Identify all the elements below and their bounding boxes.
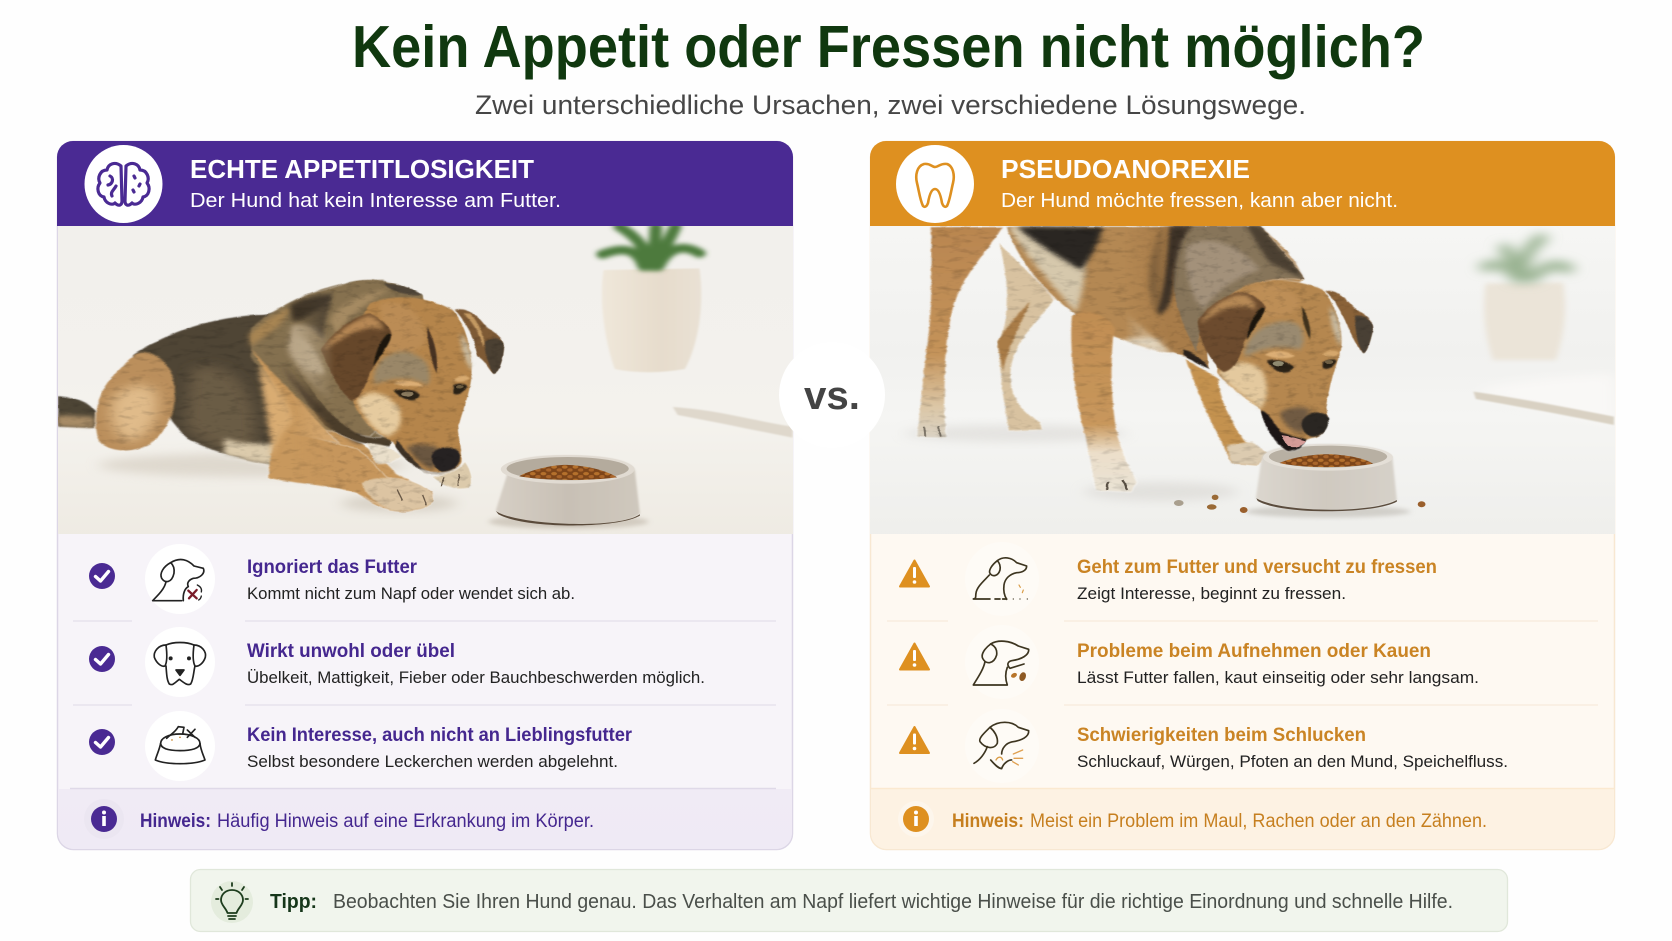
tip text: Tipp: — [270, 891, 317, 913]
icon: dog turning away — [145, 544, 215, 614]
row: Geht zum Futter — [900, 542, 1437, 616]
heading: Schwierigkeiten beim Schlucken — [1077, 724, 1366, 746]
header — [870, 141, 1615, 226]
row: Schwierigkeiten beim Schlucken — [900, 709, 1508, 783]
hint bar — [871, 788, 1614, 849]
subheading: Der Hund hat kein Interesse am Futter. — [190, 190, 561, 212]
row: Ignoriert das Futter — [89, 544, 575, 614]
photo: dog trying to eat — [870, 225, 1630, 545]
heading: Ignoriert das Futter — [247, 556, 417, 578]
vs badge: vs. — [804, 374, 860, 418]
icon: brain — [84, 145, 162, 223]
icon: check badge — [89, 563, 115, 589]
photo: dog lying in front of bowl — [50, 225, 810, 545]
heading: Geht zum Futter und versucht zu fressen — [1077, 556, 1437, 578]
icon: warning — [900, 727, 929, 753]
icon: check badge — [89, 729, 115, 755]
row: Probleme beim Aufnehmen — [900, 625, 1479, 699]
header — [57, 141, 793, 226]
hint text: Häufig Hinweis auf eine Erkrankung im Körper. — [217, 811, 594, 832]
description: Übelkeit, Mattigkeit, Fieber oder Bauchbeschwerden möglich. — [247, 669, 705, 687]
icon: dog swallowing — [965, 709, 1039, 783]
bowl — [1256, 444, 1397, 511]
subheading: Der Hund möchte fressen, kann aber nicht. — [1001, 190, 1398, 212]
icon: warning — [900, 644, 929, 670]
hint text: Hinweis: — [140, 811, 211, 832]
icon: warning — [900, 560, 929, 586]
icon: food bowl with cross — [145, 711, 215, 781]
panel: Pseudoanorexie — [870, 141, 1630, 850]
description: Kommt nicht zum Napf oder wendet sich ab. — [247, 585, 575, 603]
icon: info — [898, 801, 934, 837]
heading: Probleme beim Aufnehmen oder Kauen — [1077, 640, 1431, 662]
tip text: Beobachten Sie Ihren Hund genau. Das Verhalten am Napf liefert wichtige Hinweise für die richtige Einordnung und schnelle Hilfe. — [333, 891, 1453, 913]
row: Kein Interesse — [89, 711, 632, 781]
hint bar — [58, 788, 792, 849]
tip box — [190, 870, 1508, 932]
subtitle: Zwei unterschiedliche Ursachen, zwei verschiedene Lösungswege. — [475, 90, 1306, 120]
heading: Wirkt unwohl oder übel — [247, 640, 455, 662]
hint text: Hinweis: — [952, 811, 1024, 832]
heading: Kein Interesse, auch nicht an Lieblingsfutter — [247, 724, 632, 746]
icon: check badge — [89, 646, 115, 672]
icon: dog dropping food — [965, 625, 1039, 699]
icon: dog approaching food — [965, 542, 1039, 616]
description: Schluckauf, Würgen, Pfoten an den Mund, Speichelfluss. — [1077, 753, 1508, 771]
icon: info — [84, 799, 124, 839]
dog head — [290, 279, 504, 511]
dog body — [57, 279, 433, 512]
vs badge — [779, 342, 885, 448]
bowl — [496, 455, 640, 527]
title: Kein Appetit oder Fressen nicht möglich? — [352, 14, 1425, 80]
hint text: Meist ein Problem im Maul, Rachen oder an den Zähnen. — [1030, 811, 1487, 832]
icon: dog face — [145, 627, 215, 697]
icon: tooth — [896, 145, 974, 223]
description: Selbst besondere Leckerchen werden abgelehnt. — [247, 753, 618, 771]
description: Zeigt Interesse, beginnt zu fressen. — [1077, 585, 1346, 603]
dog legs and body — [917, 227, 1304, 492]
panel: echte Appetitlosigkeit — [50, 141, 810, 850]
description: Lässt Futter fallen, kaut einseitig oder sehr langsam. — [1077, 669, 1479, 687]
dog head — [1120, 226, 1373, 451]
row: Wirkt unwohl oder übel — [89, 627, 705, 697]
heading: PSEUDOANOREXIE — [1001, 154, 1250, 184]
spilled kibble — [1174, 495, 1425, 513]
icon: light bulb — [211, 881, 253, 923]
heading: ECHTE APPETITLOSIGKEIT — [190, 154, 534, 184]
